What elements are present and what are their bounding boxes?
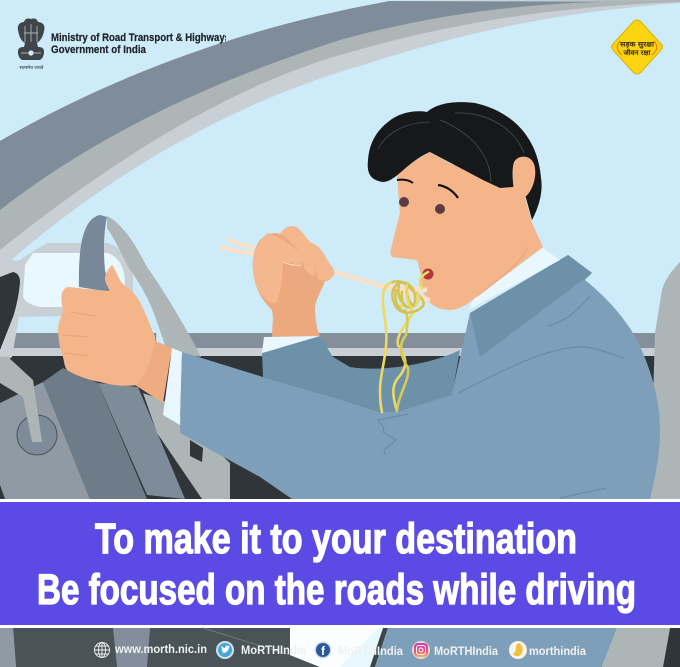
steering column and hub [0, 357, 230, 499]
shirt cuff [163, 348, 182, 425]
koo handle: morthindia [529, 646, 587, 658]
mouth [422, 268, 434, 280]
icon: koo [509, 641, 527, 659]
sky through windscreen [0, 0, 680, 333]
neck and face [390, 152, 543, 310]
icon: globe [94, 642, 110, 658]
noodles [380, 272, 428, 412]
header: ministry name: Government of India [51, 44, 147, 56]
road safety sign badge [612, 20, 662, 74]
dashboard strips [0, 333, 680, 499]
road safety sign badge: सड़क सुरक्षा [619, 42, 655, 50]
left door pillar and dark seat [0, 260, 20, 358]
windscreen pillar [0, 0, 680, 270]
illustration: driver eating noodles in car [0, 0, 680, 499]
instagram handle: MoRTHIndia [434, 646, 499, 658]
twitter handle: MoRTHIndia [241, 645, 307, 657]
icon: instagram [412, 641, 430, 659]
footer strip [0, 625, 680, 667]
jacket crease lines [378, 296, 624, 498]
hair [368, 102, 542, 220]
header: ministry name [51, 32, 226, 54]
icon: facebook: f [321, 644, 326, 658]
icon: twitter [216, 641, 234, 659]
header: government emblem [18, 18, 45, 70]
rear-view mirror [15, 243, 133, 317]
road safety sign badge: जीवन रक्षा [622, 48, 652, 57]
eyes and eyebrows [397, 180, 458, 214]
jacket collar [470, 255, 592, 357]
icon: facebook [314, 642, 332, 658]
right seat [650, 262, 680, 499]
slogan banner [0, 502, 680, 625]
driver torso and jacket [180, 255, 660, 499]
inner sleeve [262, 337, 460, 412]
emblem motto: सत्यमेव जयते [20, 64, 44, 70]
shirt collar [468, 248, 560, 310]
steering hand [58, 265, 172, 403]
white divider above banner [0, 499, 680, 502]
shirt cuff raised arm [262, 336, 320, 353]
facebook handle: MoRTHIndia [338, 646, 404, 658]
steering wheel rim [79, 215, 201, 357]
website: www.morth.nic.in [114, 644, 207, 656]
ear [512, 157, 535, 197]
header: ministry name: Ministry of Road Transport & Highways [51, 32, 230, 44]
raised hand with chopsticks [219, 226, 430, 337]
dark door slot below arm [190, 440, 203, 462]
